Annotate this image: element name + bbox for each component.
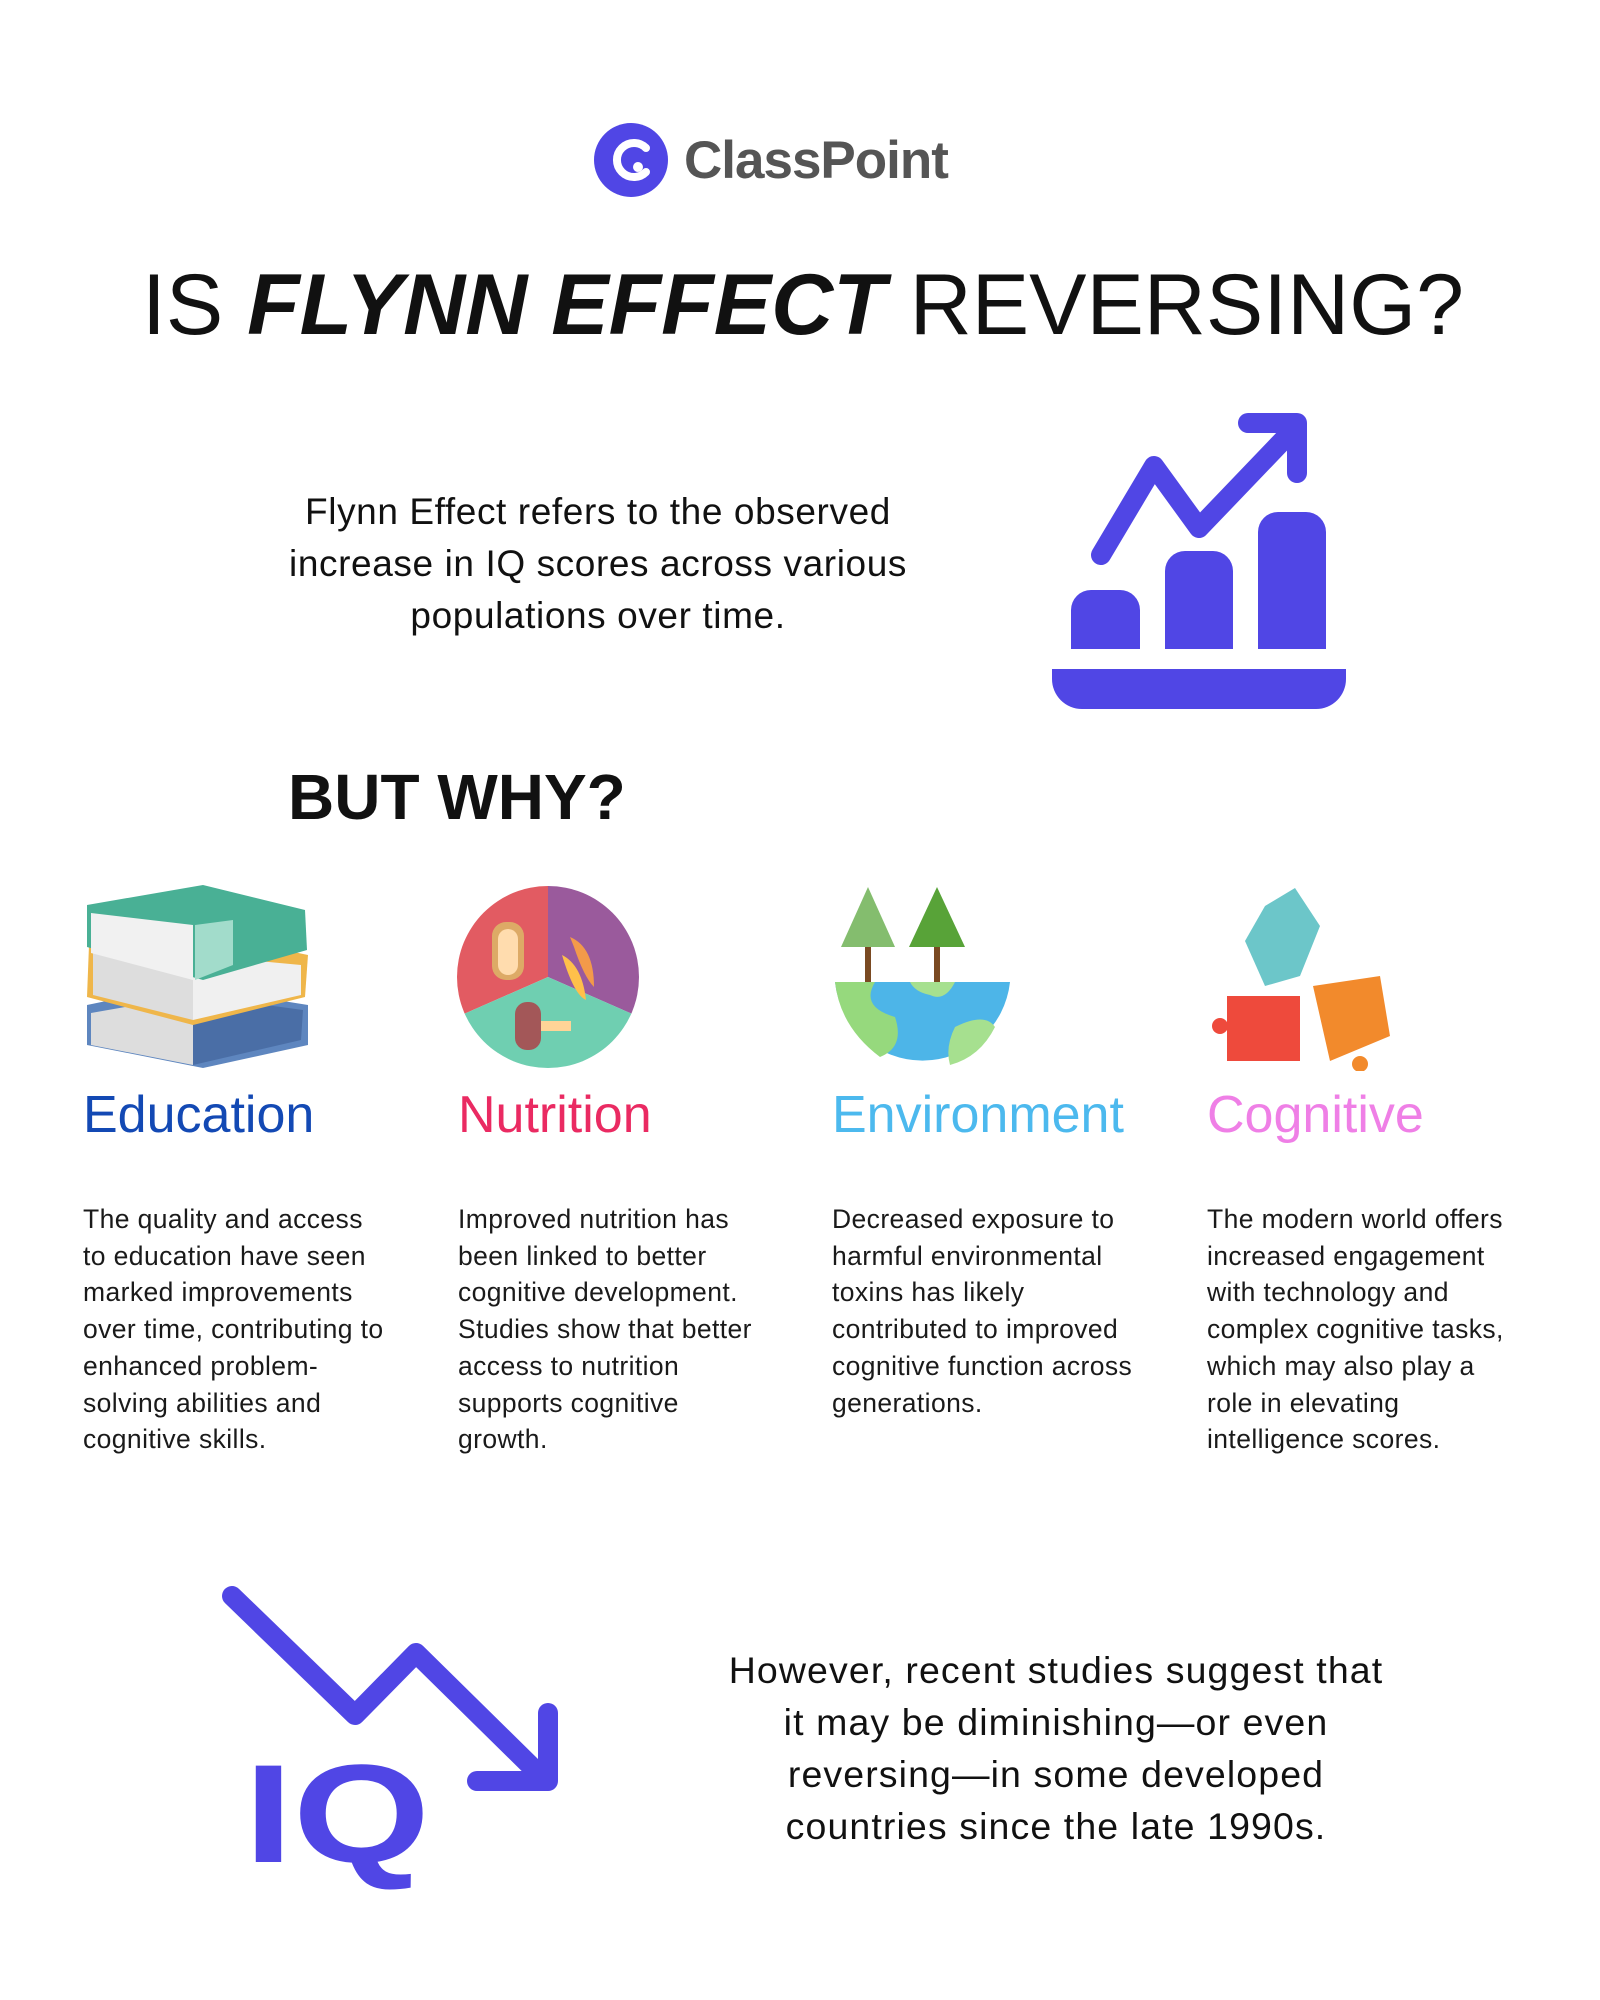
text: conclusion: [729, 1649, 1383, 1847]
text: nutrition: been linked to better: [458, 1241, 707, 1271]
intro text: populations over time.: [410, 595, 786, 636]
text: cognitive: role in elevating: [1207, 1388, 1399, 1418]
text: environment: toxins has likely: [832, 1277, 1024, 1307]
text: cognitive: increased engagement: [1207, 1241, 1485, 1271]
icon: IQ declining: IQ: [244, 1735, 430, 1892]
icon: nutrition: [457, 886, 639, 1068]
text: environment: contributed to improved: [832, 1314, 1118, 1344]
column: environment: [832, 1086, 1132, 1418]
text: cognitive: complex cognitive tasks,: [1207, 1314, 1504, 1344]
text: nutrition: Studies show that better: [458, 1314, 752, 1344]
text: environment: harmful environmental: [832, 1241, 1103, 1271]
heading: but why: BUT WHY?: [288, 761, 626, 833]
logo: ClassPoint: [684, 131, 948, 190]
text: education: enhanced problem-: [83, 1351, 318, 1381]
intro text: increase in IQ scores across various: [289, 543, 907, 584]
icon: books: [87, 885, 308, 1068]
icon: puzzle: [1212, 888, 1390, 1071]
column: nutrition: [458, 1086, 752, 1454]
text: nutrition: supports cognitive: [458, 1388, 679, 1418]
text: nutrition: access to nutrition: [458, 1351, 679, 1381]
text: conclusion: countries since the late 1990s.: [786, 1805, 1326, 1847]
text: education: to education have seen: [83, 1241, 366, 1271]
text: conclusion: However, recent studies suggest that: [729, 1649, 1383, 1691]
text: education: marked improvements: [83, 1277, 353, 1307]
logo: [594, 123, 948, 197]
text: cognitive: intelligence scores.: [1207, 1424, 1440, 1454]
text: environment: Decreased exposure to: [832, 1204, 1114, 1234]
heading: nutrition: Nutrition: [458, 1086, 652, 1144]
icon: IQ declining: [222, 1586, 558, 1892]
text: cognitive: with technology and: [1207, 1277, 1449, 1307]
icon: environment: [835, 887, 1010, 1065]
text: nutrition: Improved nutrition has: [458, 1204, 729, 1234]
text: environment: generations.: [832, 1388, 983, 1418]
icon: rising chart: [1052, 413, 1346, 709]
intro text: [289, 491, 907, 636]
text: education: The quality and access: [83, 1204, 363, 1234]
text: cognitive: The modern world offers: [1207, 1204, 1503, 1234]
text: education: solving abilities and: [83, 1388, 321, 1418]
text: nutrition: [458, 1204, 752, 1454]
text: education: over time, contributing to: [83, 1314, 384, 1344]
heading: cognitive: Cognitive: [1207, 1086, 1424, 1144]
text: nutrition: cognitive development.: [458, 1277, 738, 1307]
heading: environment: Environment: [832, 1086, 1124, 1144]
text: conclusion: reversing—in some developed: [788, 1753, 1324, 1795]
text: cognitive: [1207, 1204, 1504, 1454]
text: education: cognitive skills.: [83, 1424, 267, 1454]
intro text: Flynn Effect refers to the observed: [305, 491, 891, 532]
column: education: [83, 1086, 384, 1454]
column: cognitive: [1207, 1086, 1504, 1454]
heading: education: Education: [83, 1086, 314, 1144]
text: conclusion: it may be diminishing—or even: [784, 1701, 1328, 1743]
text: environment: [832, 1204, 1132, 1418]
title: IS FLYNN EFFECT REVERSING?: [142, 257, 1464, 353]
text: cognitive: which may also play a: [1207, 1351, 1475, 1381]
text: education: [83, 1204, 384, 1454]
text: environment: cognitive function across: [832, 1351, 1132, 1381]
text: nutrition: growth.: [458, 1424, 548, 1454]
